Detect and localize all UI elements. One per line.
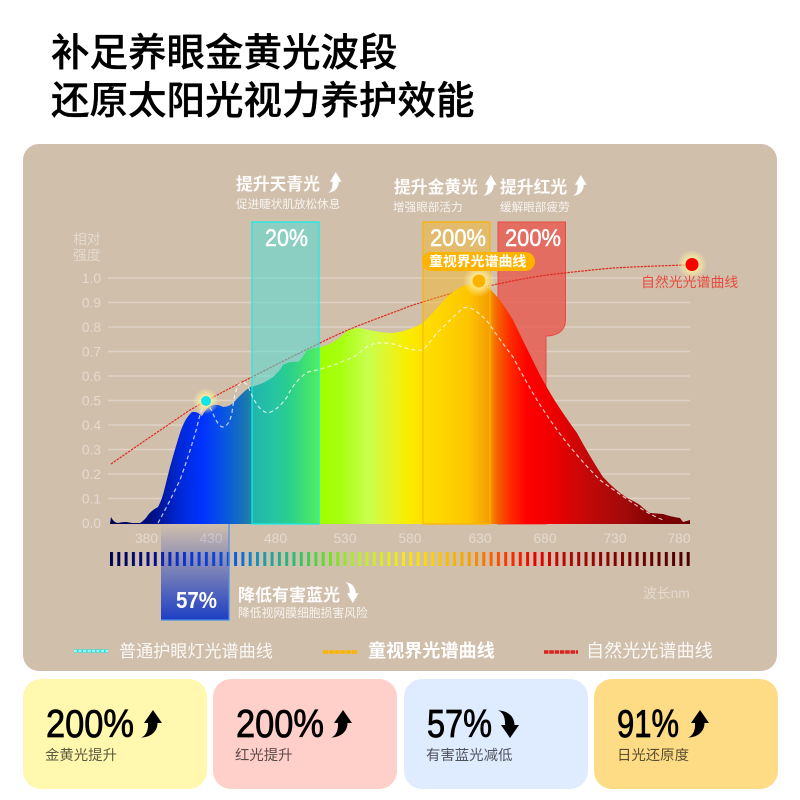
card: harmful blue -57%: 57% — [427, 703, 492, 746]
icon: up arrow — [328, 172, 342, 193]
x axis wavelength labels: 680 — [533, 531, 557, 546]
percent 57%: 57% — [176, 587, 217, 613]
card: red light +200%: 红光提升 — [235, 747, 293, 764]
x axis wavelength labels — [135, 531, 691, 546]
callout: golden light: 增强眼部活力 — [393, 200, 463, 214]
icon: up arrow — [688, 710, 709, 738]
spectrum area — [110, 283, 690, 524]
legend: golden curve: 童视界光谱曲线 — [368, 640, 495, 661]
callout: red light — [500, 175, 587, 214]
callout: harmful blue light — [238, 582, 368, 620]
title — [51, 32, 475, 123]
x axis wavelength labels: 480 — [264, 531, 287, 546]
blue light reduction band — [161, 524, 229, 620]
grid lines and y axis ticks: 0.6 — [82, 369, 101, 384]
callout: sky light: 促进睫状肌放松休息 — [236, 197, 340, 211]
x axis wavelength labels: 630 — [468, 531, 492, 546]
callout: golden light: 提升金黄光 — [394, 177, 478, 197]
x axis wavelength labels: 530 — [333, 531, 357, 546]
grid lines and y axis ticks: 0.0 — [82, 516, 101, 531]
panel: spectrum chart — [23, 144, 777, 671]
card: harmful blue -57%: 有害蓝光减低 — [426, 747, 512, 764]
x axis wavelength labels: 730 — [603, 531, 627, 546]
red light band — [498, 222, 566, 524]
percent 200% red: 200% — [505, 225, 561, 252]
cyan sky light band — [252, 222, 319, 524]
x axis wavelength labels: 580 — [398, 531, 422, 546]
card: golden light +200% — [23, 679, 207, 789]
callout: golden light — [393, 175, 497, 214]
band outlines — [252, 222, 490, 524]
legend: ordinary lamp: 普通护眼灯光谱曲线 — [119, 642, 273, 661]
legend: natural light: 自然光光谱曲线 — [586, 641, 713, 661]
ordinary eye-care lamp curve — [158, 308, 663, 523]
callout: sky light: 提升天青光 — [236, 175, 320, 194]
grid lines and y axis ticks: 0.1 — [82, 492, 101, 506]
natural light curve — [111, 265, 687, 464]
grid lines and y axis ticks: 0.7 — [82, 344, 101, 360]
icon: up arrow — [331, 710, 352, 738]
spectrum tick strip — [110, 552, 690, 566]
legend — [74, 640, 713, 661]
card: red light +200%: 200% — [236, 703, 324, 746]
label: natural light curve: 自然光光谱曲线 — [641, 274, 738, 290]
card: sunlight restoration 91%: 91% — [617, 703, 679, 746]
percent 200% golden: 200% — [430, 225, 486, 252]
callout: red light: 缓解眼部疲劳 — [500, 200, 570, 214]
grid lines and y axis ticks: 0.8 — [82, 320, 101, 335]
grid lines and y axis ticks: 0.2 — [82, 467, 101, 482]
card: golden light +200%: 金黄光提升 — [45, 747, 117, 764]
callout: red light: 提升红光 — [500, 178, 567, 197]
y axis title: 强度 — [73, 248, 101, 263]
wavelength unit: 波长nm — [643, 586, 690, 601]
percent 20%: 20% — [265, 225, 308, 252]
card: harmful blue -57% — [404, 679, 588, 789]
icon: down arrow — [345, 582, 359, 603]
title: 补足养眼金黄光波段 — [51, 32, 398, 75]
card: sunlight restoration 91%: 日光还原度 — [617, 747, 689, 764]
card: golden light +200%: 200% — [46, 703, 134, 746]
grid lines and y axis ticks: 0.3 — [82, 442, 101, 458]
grid lines and y axis ticks: 1.0 — [82, 271, 101, 286]
grid lines and y axis ticks: 0.5 — [82, 394, 101, 408]
icon: up arrow — [573, 175, 587, 196]
x axis wavelength labels: 430 — [199, 531, 223, 546]
golden light band — [423, 222, 490, 524]
callout: harmful blue light: 降低有害蓝光 — [238, 585, 340, 605]
icon: up arrow — [483, 175, 497, 196]
y axis title — [73, 232, 101, 263]
marker: natural light end — [677, 250, 707, 280]
y axis title: 相对 — [73, 232, 101, 247]
pill: golden curve label: 童视界光谱曲线 — [429, 253, 526, 269]
icon: up arrow — [141, 710, 162, 738]
icon: down arrow — [498, 710, 519, 738]
x axis wavelength labels: 380 — [135, 531, 158, 546]
grid lines and y axis ticks — [82, 271, 690, 531]
card: sunlight restoration 91% — [594, 679, 778, 789]
callout: sky light — [236, 172, 342, 211]
grid lines and y axis ticks: 0.9 — [82, 296, 101, 310]
title: 还原太阳光视力养护效能 — [51, 80, 475, 123]
card: red light +200% — [213, 679, 397, 789]
x axis wavelength labels: 780 — [667, 531, 691, 546]
grid lines and y axis ticks: 0.4 — [82, 418, 101, 433]
marker: golden curve peak — [463, 265, 495, 297]
marker: cyan point — [193, 388, 219, 414]
callout: harmful blue light: 降低视网膜细胞损害风险 — [238, 606, 368, 620]
